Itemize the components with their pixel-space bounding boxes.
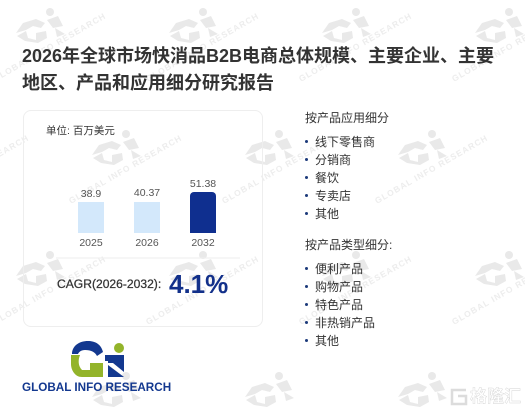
background watermark pattern: GLOBAL INFO RESEARCH [297,254,413,327]
CAGR label: CAGR(2026-2032): [57,277,161,291]
bar 2025: 2025 [79,237,103,249]
heading: by application: 按产品应用细分 [305,111,389,125]
bar 2032 [190,178,216,249]
category lists: 购物产品 [315,280,363,294]
icon: source mark [450,388,468,406]
background watermark pattern: GLOBAL INFO RESEARCH [144,254,260,327]
category lists: 其他 [315,207,339,221]
logo mark [71,341,124,377]
category lists: 线下零售商 [315,135,375,149]
bar 2025: 38.9 [81,188,101,200]
bar 2025 [78,188,104,249]
category lists: 分销商 [315,153,351,167]
background watermark pattern: GLOBAL INFO RESEARCH [297,11,413,84]
bar 2026 [134,187,160,249]
unit label: 单位: 百万美元 [46,125,115,137]
source watermark [450,387,521,406]
CAGR value: 4.1% [169,269,228,299]
heading: by type: 按产品类型细分: [305,238,392,252]
category lists: 特色产品 [315,298,363,312]
background watermark pattern: GLOBAL INFO RESEARCH [67,133,183,206]
category lists: 专卖店 [315,189,351,203]
logo wordmark: GLOBAL INFO RESEARCH [22,381,171,394]
background watermark pattern: GLOBAL INFO RESEARCH [144,11,260,84]
background watermark pattern: GLOBAL INFO RESEARCH [220,133,336,206]
bar 2032: 51.38 [190,178,216,190]
bar 2026: 2026 [135,237,159,249]
source name: 格隆汇 [470,387,521,406]
title [22,46,494,93]
title: 地区、产品和应用细分研究报告 [22,73,274,93]
category lists: 便利产品 [315,262,363,276]
bar 2026: 40.37 [134,187,160,199]
panel: market size card [23,110,263,327]
category lists: 非热销产品 [315,316,375,330]
bar 2032: 2032 [191,237,215,249]
background watermark pattern: GLOBAL INFO RESEARCH [373,133,489,206]
category lists: 其他 [315,334,339,348]
title: 2026年全球市场快消品B2B电商总体规模、主要企业、主要 [22,46,494,66]
category lists: 餐饮 [315,171,339,185]
logo: Global Info Research [22,341,171,394]
bar chart [56,178,240,258]
